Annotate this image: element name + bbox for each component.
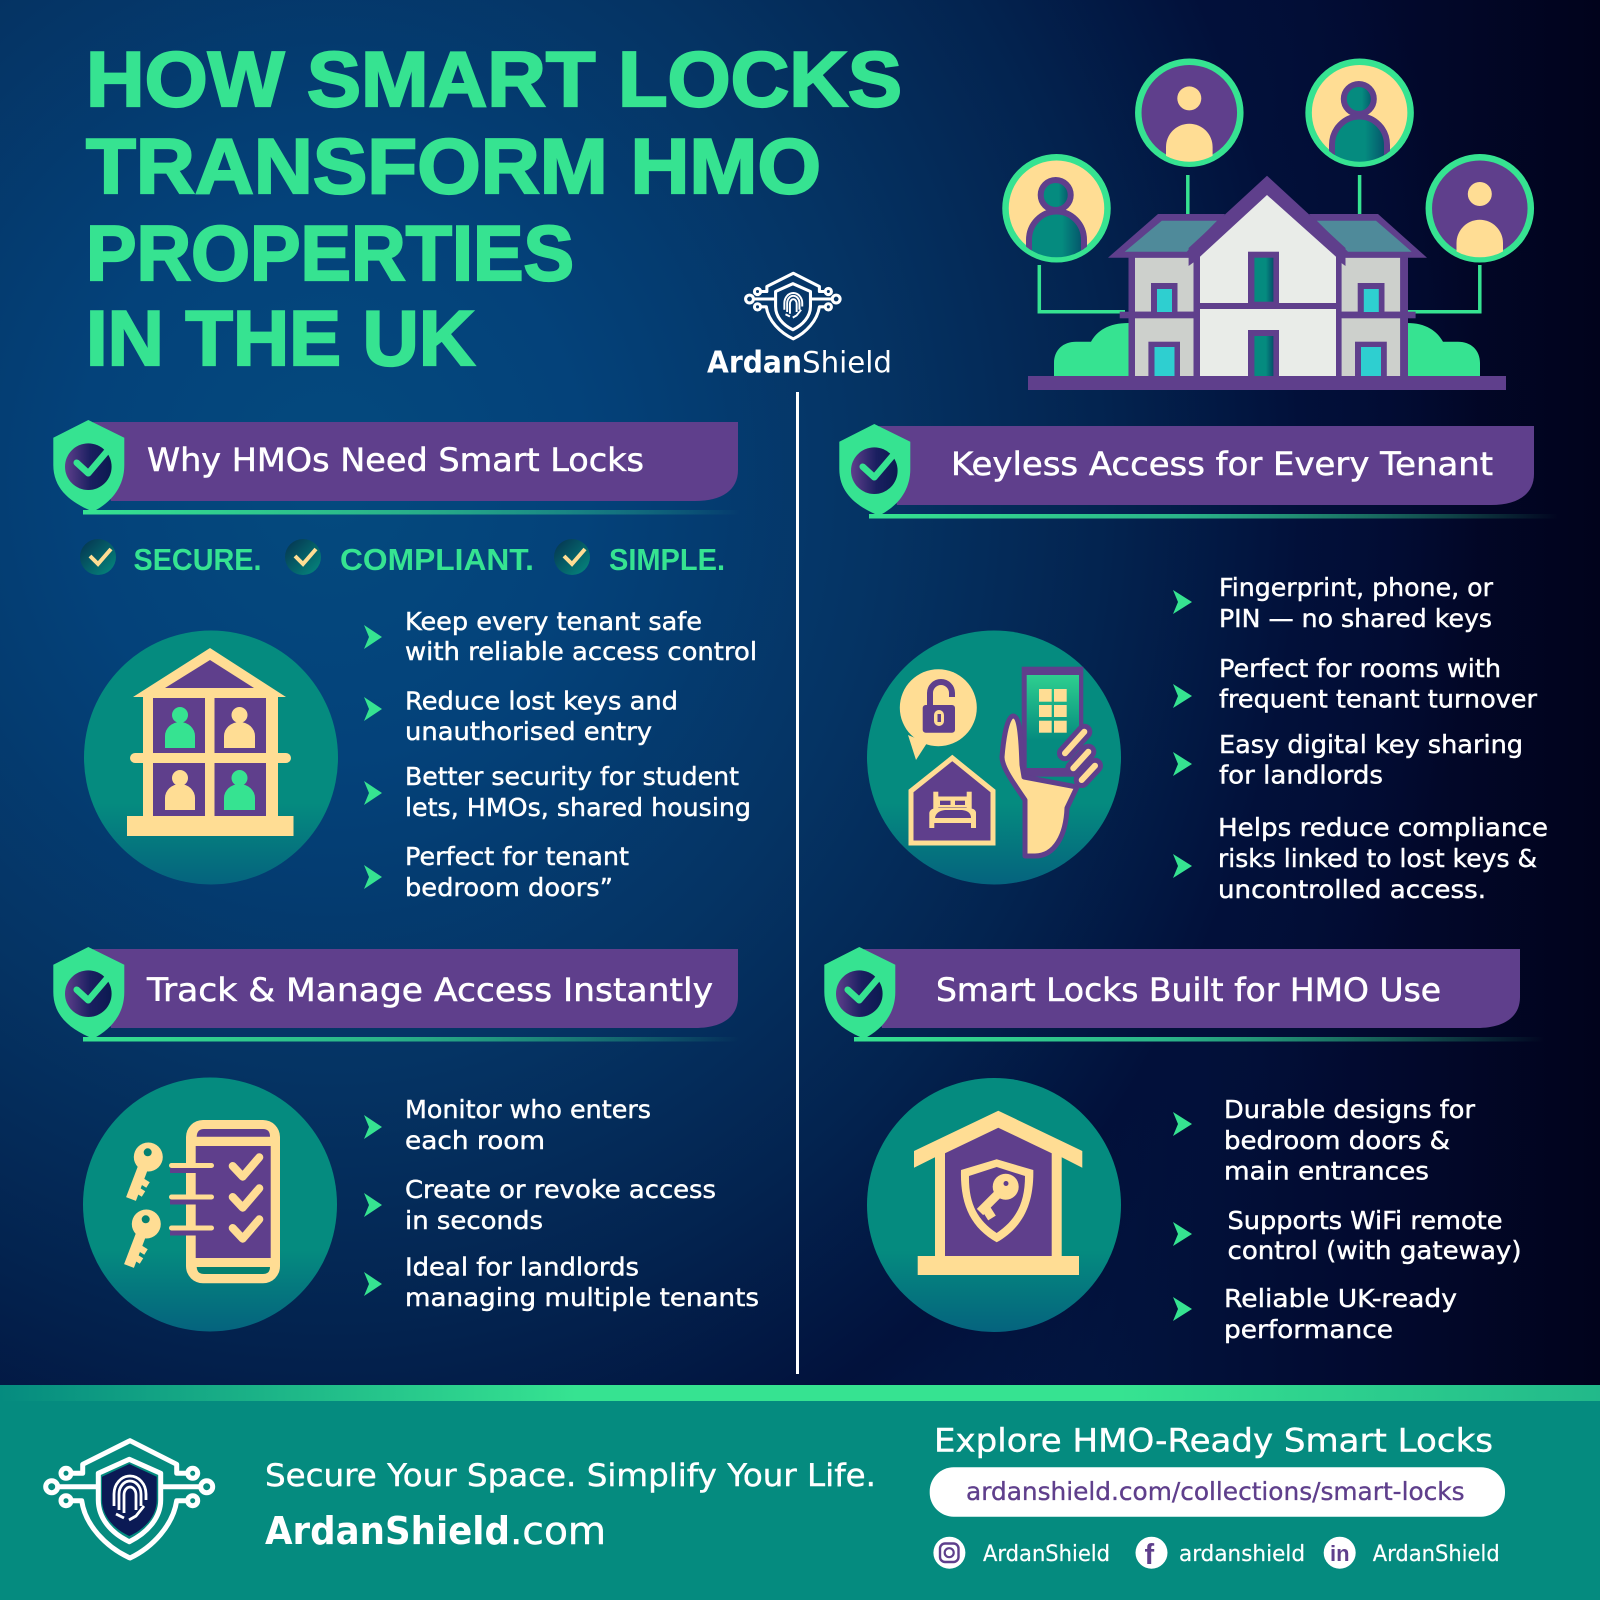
bullet list: Easy digital key sharing	[1219, 730, 1523, 759]
bullet list: Perfect for tenant	[405, 842, 629, 871]
logo: ArdanShield footer	[46, 1441, 213, 1558]
call to action: Explore HMO-Ready Smart Locks	[934, 1422, 1493, 1460]
tagline: Secure Your Space. Simplify Your Life.	[265, 1458, 876, 1494]
panel: track and manage access instantly	[53, 947, 759, 1332]
icon: facebook: f	[1144, 1539, 1154, 1571]
icon: house with shield and key	[867, 1078, 1121, 1332]
title: HOW SMART LOCKS	[86, 35, 902, 123]
bullet list: with reliable access control	[405, 637, 757, 666]
bullet list: Reliable UK-ready	[1224, 1284, 1457, 1313]
bullet list: Better security for student	[405, 762, 739, 791]
tenant avatar: right	[1429, 157, 1531, 270]
secure compliant simple row	[80, 539, 725, 577]
secure compliant simple row: SECURE.	[134, 542, 262, 577]
tagline	[265, 1458, 876, 1553]
bullet list: Helps reduce compliance	[1218, 813, 1548, 842]
connector lines	[1039, 175, 1480, 312]
tenant avatar: centre left	[1138, 62, 1240, 175]
icon: bed	[929, 792, 976, 828]
social links: ArdanShield	[983, 1542, 1110, 1567]
panel: keyless access for every tenant	[839, 424, 1558, 904]
tenant avatar: centre right	[1309, 62, 1411, 175]
bullet list: managing multiple tenants	[405, 1283, 759, 1312]
logo: ArdanShield header: Shield	[802, 346, 892, 380]
icon: instagram	[933, 1537, 965, 1569]
bullet list: PIN — no shared keys	[1219, 604, 1492, 633]
title: PROPERTIES	[86, 209, 574, 297]
bullet list: uncontrolled access.	[1218, 875, 1486, 904]
secure compliant simple row: COMPLIANT.	[340, 542, 534, 577]
bullet list	[1173, 573, 1548, 904]
bullet list: bedroom doors”	[405, 873, 613, 902]
bullet list: in seconds	[405, 1206, 543, 1235]
panel: smart locks built for HMO use	[824, 947, 1544, 1344]
heading banner	[53, 947, 740, 1042]
bullet list: each room	[405, 1126, 545, 1155]
icon: key two	[129, 1210, 161, 1266]
logo: ArdanShield header: Ardan	[707, 346, 802, 381]
bullet list: lets, HMOs, shared housing	[405, 793, 751, 822]
bullet list: main entrances	[1224, 1156, 1429, 1186]
bullet list: Create or revoke access	[405, 1175, 716, 1204]
bullet list: control (with gateway)	[1228, 1236, 1522, 1265]
bullet list: risks linked to lost keys &	[1218, 844, 1537, 873]
title: TRANSFORM HMO	[86, 122, 821, 210]
heading banner	[53, 420, 740, 514]
call to action: ardanshield.com/collections/smart-locks	[966, 1477, 1465, 1506]
bullet list: Monitor who enters	[405, 1095, 651, 1124]
heading banner	[824, 947, 1544, 1042]
title	[86, 35, 902, 382]
bullet list: for landlords	[1219, 760, 1383, 790]
call to action	[930, 1422, 1505, 1517]
bullet list: Supports WiFi remote	[1228, 1206, 1502, 1235]
heading banner: Why HMOs Need Smart Locks	[147, 441, 644, 479]
icon: phone checklist and keys	[83, 1078, 337, 1332]
icon: shared house with tenants	[84, 630, 338, 884]
bullet list: Durable designs for	[1224, 1095, 1476, 1124]
central divider	[796, 392, 799, 1374]
tagline: ArdanShield	[265, 1509, 510, 1553]
bullet list: Reduce lost keys and	[405, 686, 678, 716]
bullet list: bedroom doors &	[1224, 1126, 1450, 1155]
bushes	[1054, 323, 1480, 376]
tagline: .com	[510, 1509, 606, 1553]
bullet list: Perfect for rooms with	[1219, 654, 1501, 683]
icon: linkedin	[1324, 1537, 1356, 1569]
bullet list	[1173, 1095, 1522, 1344]
footer	[0, 1385, 1600, 1600]
bullet list: frequent tenant turnover	[1219, 684, 1538, 714]
secure compliant simple row: SIMPLE.	[609, 542, 725, 577]
bullet list: unauthorised entry	[405, 717, 652, 746]
heading banner	[839, 424, 1558, 518]
bullet list: Keep every tenant safe	[405, 607, 702, 636]
bullet list	[364, 607, 757, 902]
heading banner: Smart Locks Built for HMO Use	[936, 971, 1441, 1009]
icon: facebook	[1136, 1537, 1168, 1571]
icon: linkedin: in	[1330, 1541, 1350, 1566]
tenant avatar: left	[1006, 157, 1108, 270]
bullet list: performance	[1224, 1315, 1393, 1344]
title: IN THE UK	[86, 294, 475, 382]
heading banner: Keyless Access for Every Tenant	[951, 445, 1493, 483]
social links: ardanshield	[1179, 1542, 1305, 1567]
icon: key one	[131, 1142, 163, 1199]
logo: ArdanShield header	[707, 273, 892, 381]
bullet list: Fingerprint, phone, or	[1219, 573, 1494, 602]
bullet list: Ideal for landlords	[405, 1252, 639, 1282]
bullet list	[364, 1095, 759, 1312]
icon: phone access and bedroom	[867, 630, 1121, 884]
illustration: house with four tenants	[1006, 62, 1531, 390]
house	[1028, 176, 1506, 390]
social links	[933, 1537, 1500, 1571]
panel: why HMOs need smart locks	[53, 420, 757, 902]
social links: ArdanShield	[1373, 1542, 1500, 1567]
heading banner: Track & Manage Access Instantly	[146, 971, 713, 1009]
